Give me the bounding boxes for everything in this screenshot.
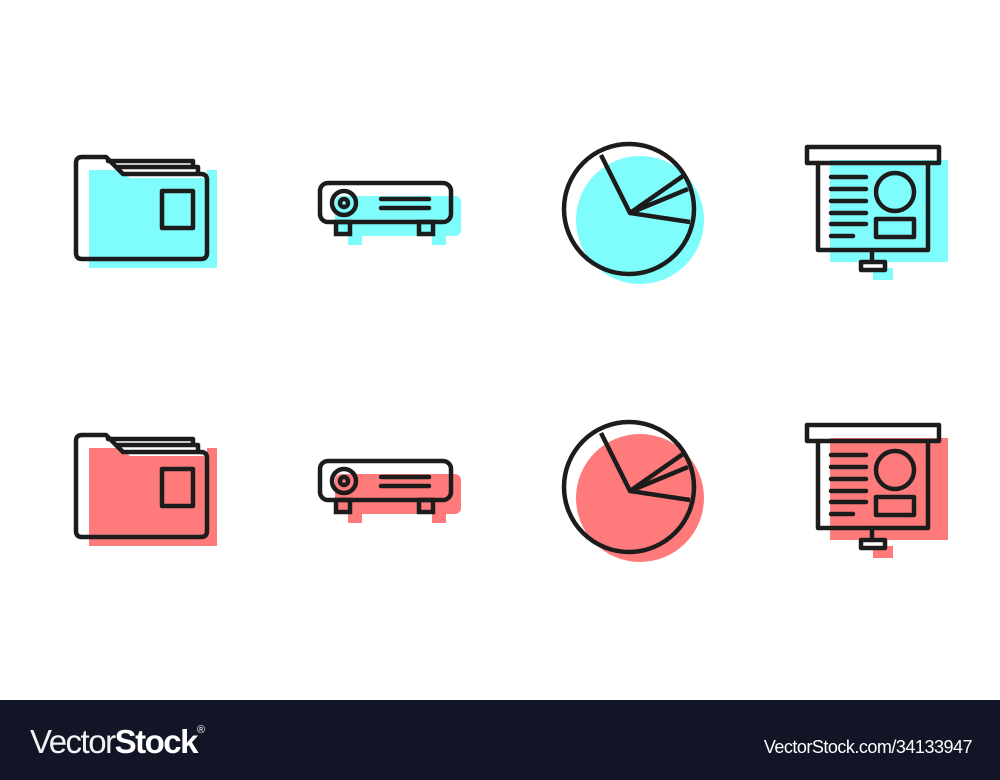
url text: VectorStock.com/34133947 — [764, 737, 972, 757]
icon: presentation board red — [807, 425, 948, 558]
icon: presentation board cyan — [807, 147, 948, 280]
footer bar — [0, 700, 1000, 780]
logo text: VectorStock — [30, 723, 197, 760]
icon: folder cyan — [76, 157, 217, 268]
icon: folder red — [76, 435, 217, 546]
logo text: ® — [197, 724, 205, 736]
row: cyan icons — [76, 144, 948, 284]
icon: pie chart cyan — [564, 144, 704, 284]
icon: pie chart red — [564, 422, 704, 562]
row: red icons — [76, 422, 948, 562]
icon: projector cyan — [320, 183, 461, 245]
icon: projector red — [320, 461, 461, 523]
